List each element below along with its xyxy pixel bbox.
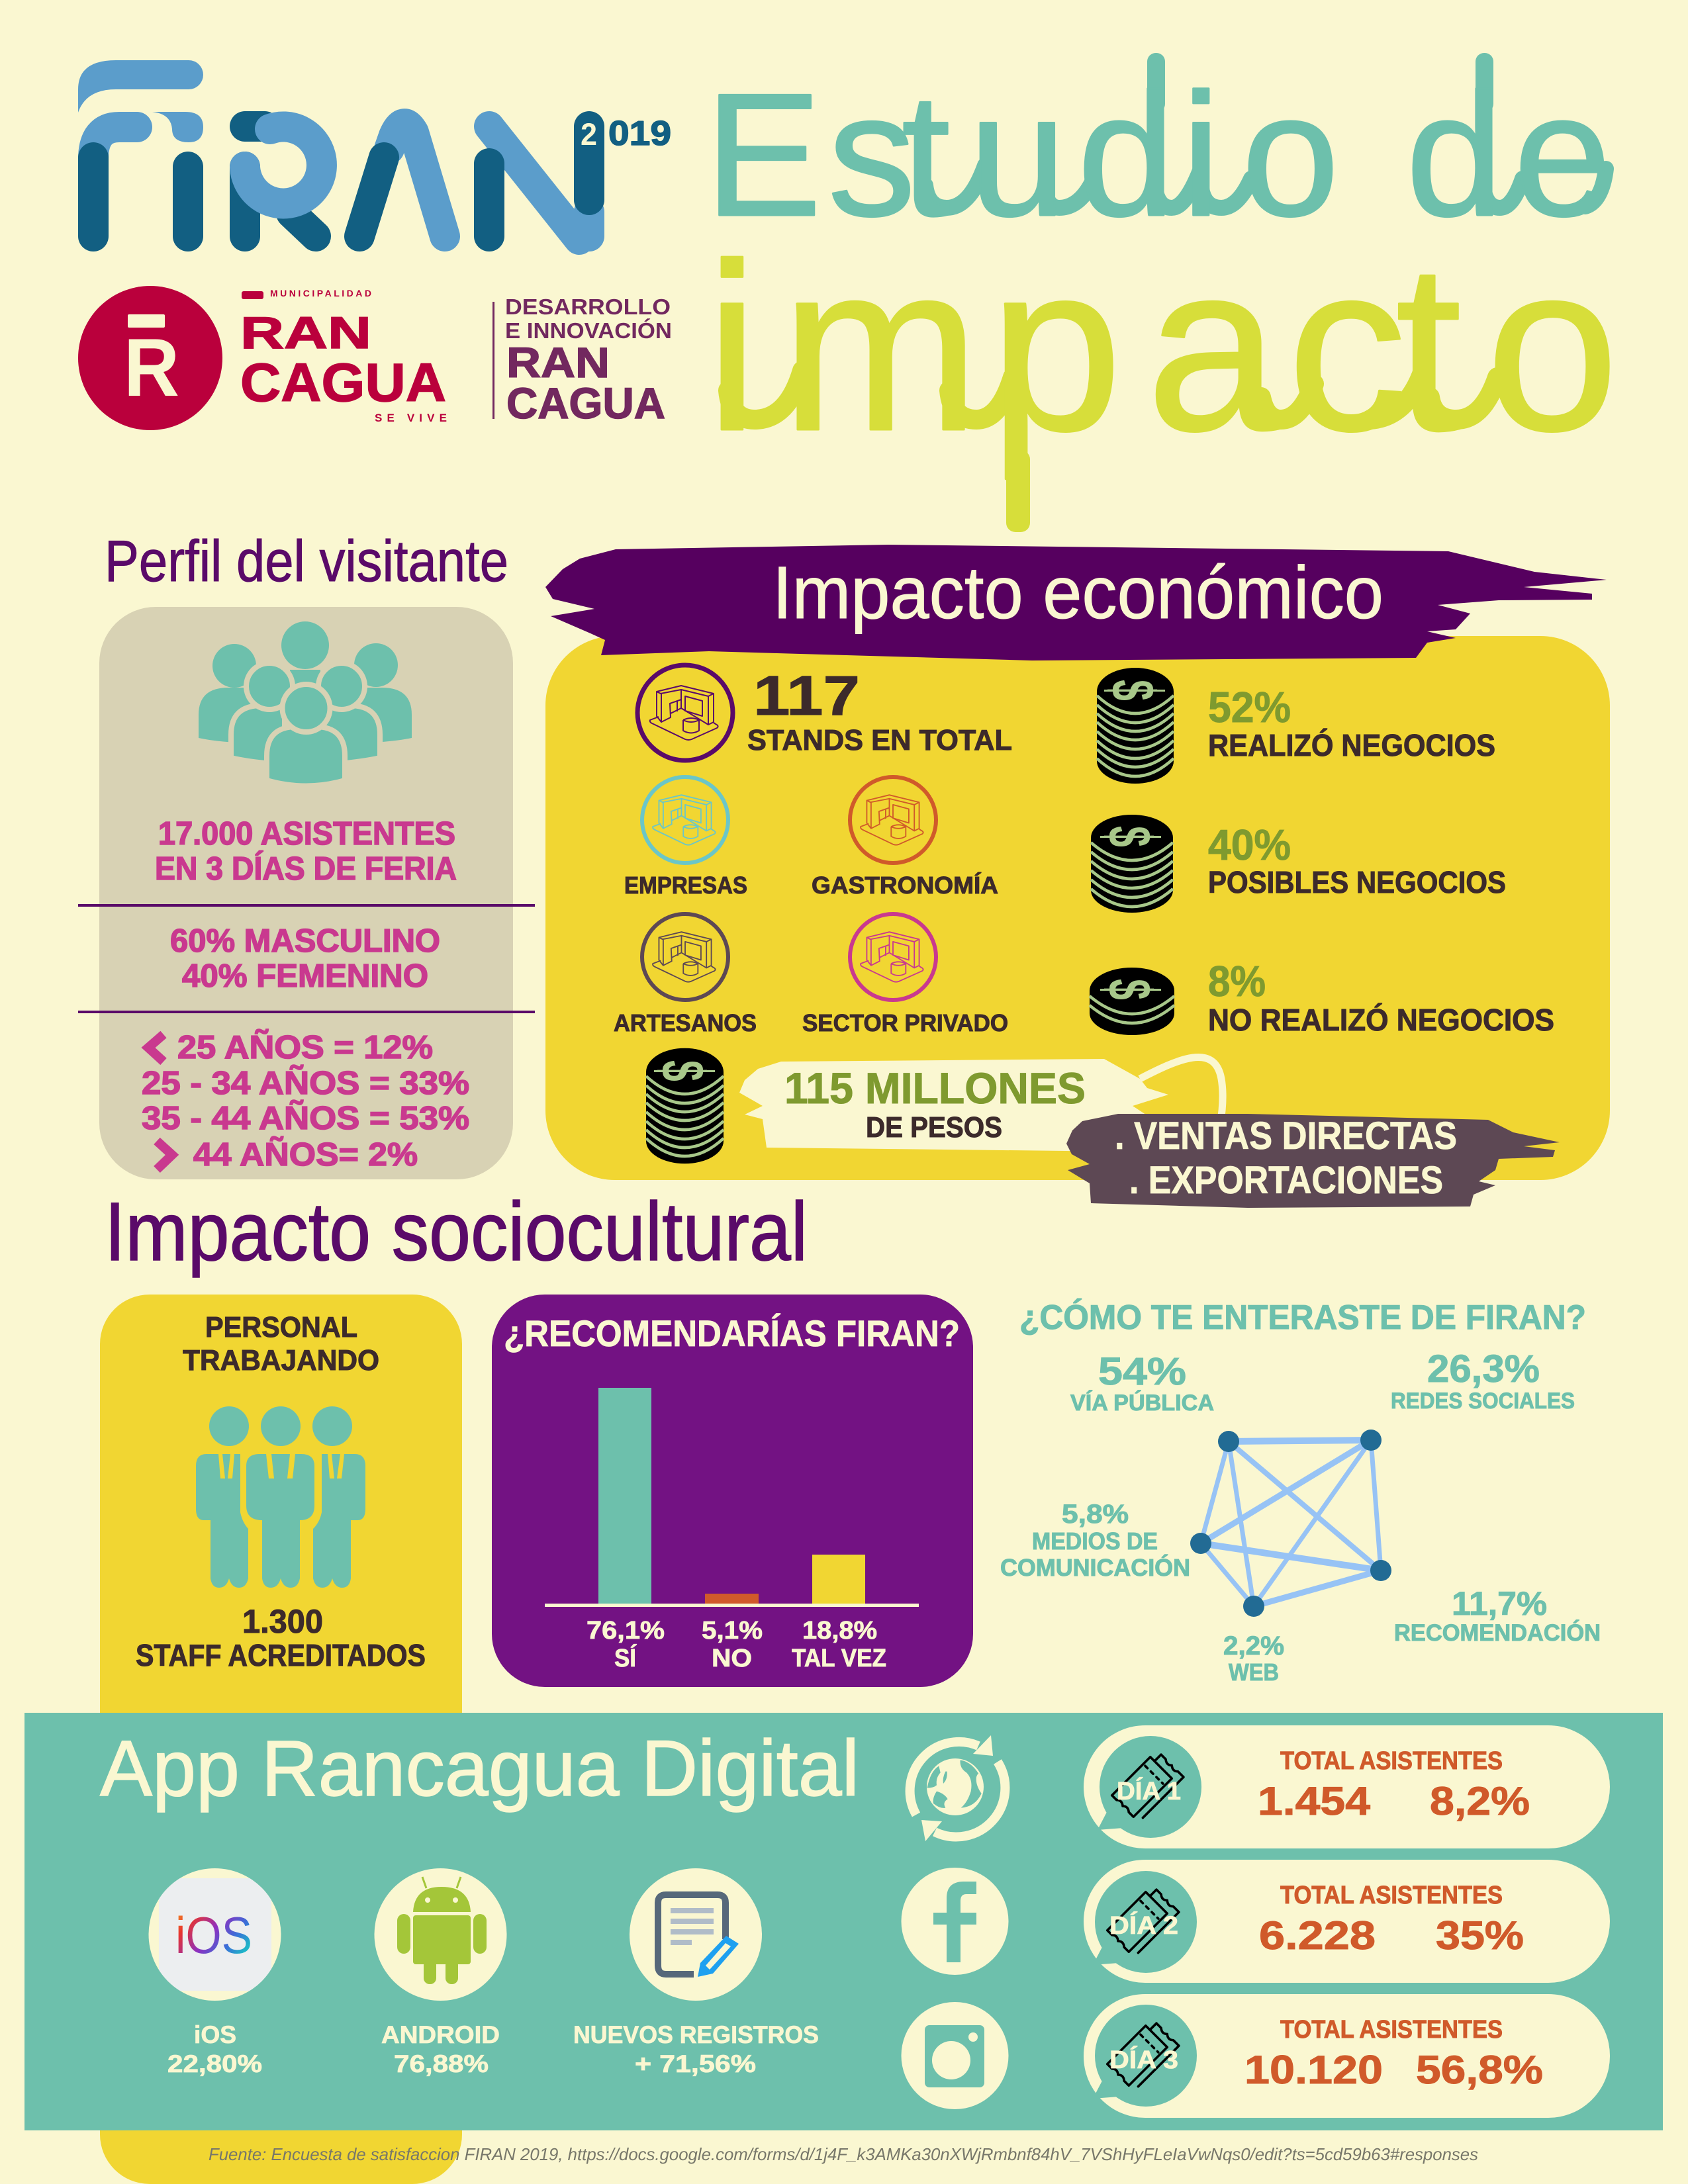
stat: sector privado — [802, 914, 1008, 1036]
stat: medios de comunicacion: 5,8% — [1062, 1500, 1129, 1529]
panel: app rancagua digital — [24, 1713, 1663, 2130]
stat: iOS: 22,80% — [167, 2050, 262, 2077]
heading: personal trabajando — [183, 1311, 379, 1377]
stat: 1.300 staff: STAFF ACREDITADOS — [136, 1638, 426, 1672]
bar chart: 5,1% — [702, 1617, 763, 1645]
card: dia 1: TOTAL ASISTENTES — [1280, 1747, 1503, 1775]
heading: Impacto sociocultural: Impacto sociocultural — [105, 1186, 808, 1278]
stat: asistentes — [155, 816, 457, 887]
stat: via publica: 54% — [1098, 1350, 1186, 1393]
stat: medios de comunicacion: MEDIOS DE — [1032, 1527, 1158, 1555]
callout: ventas directas y exportaciones — [1066, 1114, 1560, 1208]
logo: Desarrollo e Innovacion Rancagua: DESARROLLO — [505, 295, 671, 319]
card: dia 3: TOTAL ASISTENTES — [1280, 2016, 1503, 2044]
stat: 40%: 40% — [1208, 821, 1291, 869]
stat: empresas — [624, 777, 747, 899]
logo: Desarrollo e Innovacion Rancagua: RAN — [506, 339, 610, 387]
stat: redes sociales — [1391, 1347, 1575, 1414]
stat: nuevos registros: NUEVOS REGISTROS — [573, 2021, 819, 2048]
stat: 117 stands — [637, 664, 1012, 760]
stat: 40%: POSIBLES NEGOCIOS — [1208, 865, 1506, 899]
bar chart: TAL VEZ — [792, 1645, 886, 1672]
card: dia 3 — [1084, 1994, 1610, 2118]
stat: recomendacion: RECOMENDACIÓN — [1394, 1619, 1601, 1646]
stat: medios de comunicacion — [1000, 1500, 1190, 1581]
card: dia 3: DÍA 3 — [1109, 2045, 1178, 2074]
stat: redes sociales: 26,3% — [1427, 1347, 1540, 1390]
banner: impacto economico — [545, 545, 1607, 660]
stat: 1.300 staff: 1.300 — [242, 1603, 323, 1640]
network diagram — [1190, 1430, 1391, 1617]
panel: recomendarias firan — [492, 1295, 973, 1687]
logo: Municipalidad de Rancagua: CAGUA — [240, 353, 446, 413]
card: dia 1: 1.454 — [1258, 1779, 1371, 1823]
stat: 40% — [1208, 821, 1506, 899]
bar chart: 76,1% — [586, 1617, 665, 1645]
heading: personal trabajando: PERSONAL — [205, 1311, 357, 1343]
stat: edades: 25 AÑOS = 12% — [177, 1030, 433, 1066]
icon: coin stack 115 millones — [646, 1048, 724, 1163]
stat: genero — [170, 923, 440, 994]
stat: 1.300 staff — [136, 1603, 426, 1672]
stat: medios de comunicacion: COMUNICACIÓN — [1000, 1553, 1190, 1581]
stat: recomendacion: 11,7% — [1452, 1585, 1547, 1622]
icon: nuevos registros — [630, 1868, 762, 2001]
card: dia 1: DÍA 1 — [1117, 1776, 1181, 1805]
logo: Municipalidad de Rancagua: R — [124, 322, 179, 414]
logo: Desarrollo e Innovacion Rancagua: E INNOVACIÓN — [505, 318, 672, 343]
stat: via publica: VÍA PÚBLICA — [1070, 1390, 1214, 1416]
stat: gastronomia: GASTRONOMÍA — [812, 872, 998, 899]
stat: iOS — [167, 2021, 262, 2077]
icon: android — [375, 1868, 507, 2001]
logo: Municipalidad de Rancagua: MUNICIPALIDAD — [270, 288, 371, 298]
stat: 8% — [1208, 957, 1554, 1037]
logo: FIRAN 2019 — [78, 60, 671, 240]
bar chart: SÍ — [614, 1643, 637, 1672]
stat: android: ANDROID — [381, 2021, 500, 2048]
stat: edades: 25 - 34 AÑOS = 33% — [142, 1066, 469, 1101]
icon: coin stack 40%: $ — [1096, 826, 1163, 847]
card: dia 3: 10.120 — [1244, 2048, 1383, 2092]
logo: Desarrollo e Innovacion Rancagua: CAGUA — [506, 379, 665, 428]
icon: coin stack 115 millones: $ — [649, 1060, 716, 1081]
logo: Municipalidad de Rancagua: RAN — [240, 308, 371, 358]
icon: web globe with arrows — [910, 1735, 1005, 1841]
callout: 115 millones de pesos: 115 MILLONES — [784, 1064, 1086, 1113]
icon: instagram — [902, 2002, 1009, 2109]
title — [705, 53, 1618, 532]
stat: 52%: REALIZÓ NEGOCIOS — [1208, 728, 1495, 762]
icon: coin stack 8% — [1090, 968, 1174, 1035]
heading: recomendarias: ¿RECOMENDARÍAS FIRAN? — [504, 1312, 960, 1354]
panel: impacto economico — [545, 545, 1610, 1208]
callout: 115 millones de pesos — [739, 1057, 1223, 1152]
card: dia 2 — [1084, 1860, 1610, 1983]
icon: facebook — [902, 1868, 1009, 1975]
stat: recomendacion — [1394, 1585, 1601, 1646]
heading: personal trabajando: TRABAJANDO — [183, 1344, 379, 1377]
icon: iOS — [148, 1868, 281, 2001]
source note: Fuente: Encuesta de satisfaccion FIRAN 2019, https://docs.google.com/forms/d/1j4F_k3AMKa30nXWjRmbnf84hV_7VShHyFLeIaVwNqs0/edit?ts=5cd59b63#responses — [209, 2144, 1478, 2164]
logo: Desarrollo e Innovacion Rancagua — [492, 295, 672, 428]
stat: 117 stands: STANDS EN TOTAL — [747, 724, 1012, 756]
stat: 8%: 8% — [1208, 957, 1266, 1005]
stat: asistentes: EN 3 DÍAS DE FERIA — [155, 851, 457, 887]
stat: android: 76,88% — [394, 2050, 489, 2077]
stat: web: 2,2% — [1223, 1631, 1284, 1661]
panel: como te enteraste — [1000, 1298, 1601, 1686]
card: dia 3: 56,8% — [1416, 2048, 1543, 2092]
callout: ventas directas y exportaciones: . EXPORTACIONES — [1129, 1159, 1443, 1202]
callout: ventas directas y exportaciones: . VENTAS DIRECTAS — [1115, 1115, 1457, 1158]
stat: web — [1223, 1631, 1284, 1686]
stat: redes sociales: REDES SOCIALES — [1391, 1388, 1575, 1414]
stat: genero: 60% MASCULINO — [170, 923, 440, 959]
stat: edades: 35 - 44 AÑOS = 53% — [142, 1101, 469, 1136]
callout: 115 millones de pesos: DE PESOS — [866, 1111, 1002, 1144]
bar chart: 18,8% — [802, 1617, 877, 1645]
stat: 52% — [1208, 683, 1495, 762]
stat: edades: 44 AÑOS= 2% — [193, 1137, 418, 1173]
icon: coin stack 52% — [1097, 668, 1174, 784]
panel: perfil del visitante — [99, 607, 513, 1179]
icon: iOS: iOS — [175, 1906, 252, 1964]
card: dia 2: 6.228 — [1259, 1913, 1376, 1958]
icon: coin stack 8%: $ — [1096, 979, 1163, 1000]
heading: como te enteraste: ¿CÓMO TE ENTERASTE DE FIRAN? — [1019, 1298, 1586, 1337]
icon: three staff members — [196, 1406, 365, 1588]
logo: Municipalidad de Rancagua: SE VIVE — [375, 412, 447, 424]
stat: artesanos: ARTESANOS — [614, 1009, 757, 1036]
icon: group of people — [199, 621, 412, 786]
stat: genero: 40% FEMENINO — [182, 958, 428, 994]
stat: edades — [142, 1030, 469, 1173]
stat: nuevos registros — [573, 2021, 819, 2077]
card: dia 1: 8,2% — [1430, 1779, 1530, 1823]
title: impacto — [706, 214, 1618, 482]
stat: 117 stands: 117 — [753, 664, 860, 727]
panel: personal trabajando — [100, 1295, 462, 2184]
logo: Municipalidad de Rancagua — [78, 286, 447, 430]
stat: asistentes: 17.000 ASISTENTES — [158, 816, 455, 852]
bar chart — [545, 1388, 919, 1672]
logo: FIRAN 2019: 2 — [581, 116, 597, 152]
stat: android — [381, 2021, 500, 2077]
stat: 52%: 52% — [1208, 683, 1291, 731]
heading: Perfil del visitante: Perfil del visitante — [105, 528, 508, 594]
icon: coin stack 40% — [1091, 815, 1173, 913]
title: Estudio de — [705, 57, 1611, 252]
bar chart: NO — [712, 1645, 752, 1672]
stat: gastronomia — [812, 777, 998, 899]
heading: app rancagua digital: App Rancagua Digital — [100, 1724, 859, 1813]
stat: empresas: EMPRESAS — [624, 872, 747, 899]
stat: nuevos registros: + 71,56% — [635, 2050, 756, 2077]
stat: 8%: NO REALIZÓ NEGOCIOS — [1208, 1003, 1554, 1037]
stat: web: WEB — [1229, 1659, 1279, 1686]
stat: artesanos — [614, 914, 757, 1036]
icon: coin stack 52%: $ — [1099, 680, 1166, 701]
card: dia 1 — [1084, 1725, 1610, 1848]
card: dia 2: 35% — [1436, 1913, 1524, 1958]
stat: iOS: iOS — [194, 2021, 236, 2048]
banner: impacto economico: Impacto económico — [773, 551, 1383, 634]
card: dia 2: TOTAL ASISTENTES — [1280, 1882, 1503, 1909]
stat: via publica — [1070, 1350, 1214, 1416]
stat: sector privado: SECTOR PRIVADO — [802, 1009, 1008, 1036]
card: dia 2: DÍA 2 — [1109, 1911, 1178, 1940]
logo: FIRAN 2019: 019 — [608, 114, 671, 153]
